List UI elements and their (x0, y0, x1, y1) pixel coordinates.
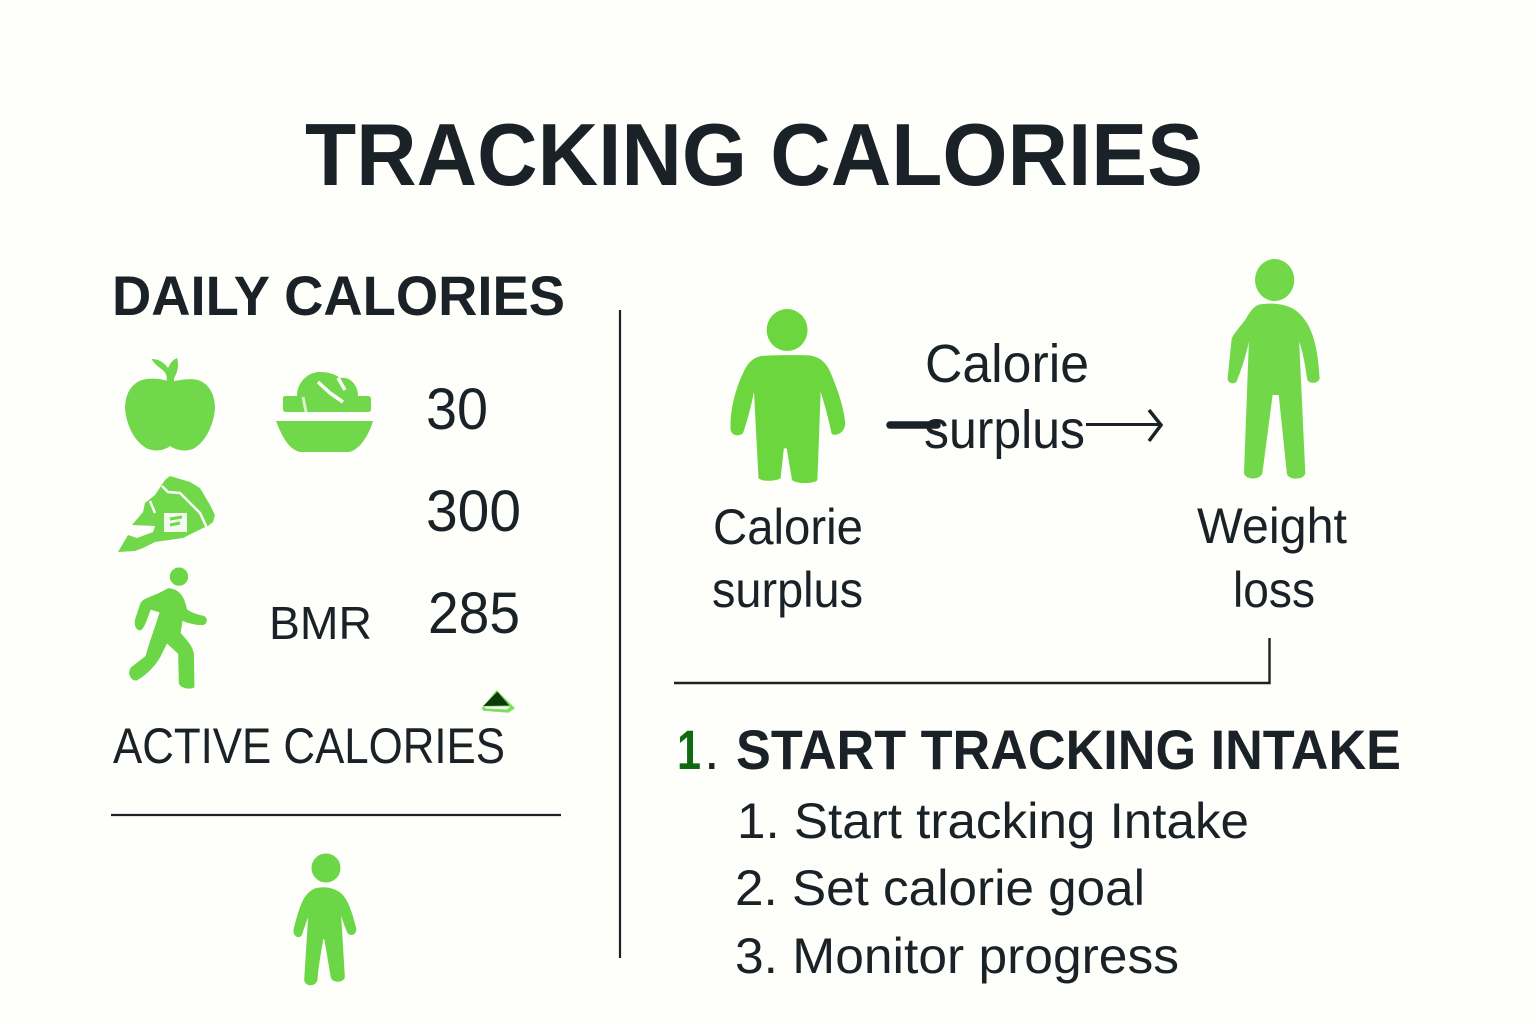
label: calorie surplus (712, 499, 863, 618)
step list: 3. Monitor progress (735, 928, 1179, 984)
heading: start tracking intake: 1 (677, 718, 701, 781)
icon: salad bowl (276, 372, 373, 452)
value: 285: 285 (428, 581, 520, 646)
arrow: calorie surplus to weight loss (890, 410, 1161, 441)
title: TRACKING CALORIES (305, 105, 1203, 204)
label: calorie surplus on arrow (924, 334, 1089, 460)
heading: start tracking intake: START TRACKING INTAKE (736, 718, 1401, 781)
icon: standing person (294, 854, 355, 984)
label: calorie surplus: Calorie (713, 499, 863, 555)
step list: 2. Set calorie goal (735, 860, 1145, 916)
value: 30: 30 (426, 377, 488, 442)
value: 300: 300 (426, 479, 521, 544)
step list: 1. Start tracking Intake (737, 793, 1249, 849)
label: BMR: BMR (269, 597, 372, 649)
label: weight loss: loss (1233, 562, 1315, 618)
label: calorie surplus: surplus (712, 562, 863, 618)
label: calorie surplus on arrow: surplus (924, 400, 1085, 460)
label: weight loss: Weight (1197, 498, 1347, 554)
step list (735, 793, 1249, 984)
icon: slimmer person (1228, 259, 1320, 479)
label: active calories: ACTIVE CALORIES (113, 718, 505, 774)
panel: daily calories (111, 264, 565, 984)
icon: apple (125, 358, 215, 450)
icon: triangle marker (482, 690, 515, 713)
icon: larger person (730, 309, 845, 483)
label: weight loss (1197, 498, 1347, 618)
heading: daily calories: DAILY CALORIES (112, 264, 565, 327)
panel: calorie flow (674, 259, 1347, 683)
icon: pizza slice (118, 476, 215, 552)
icon: walking person (130, 569, 206, 687)
label: calorie surplus on arrow: Calorie (925, 334, 1089, 394)
panel: steps (677, 718, 1401, 984)
heading: start tracking intake: . (704, 718, 720, 781)
